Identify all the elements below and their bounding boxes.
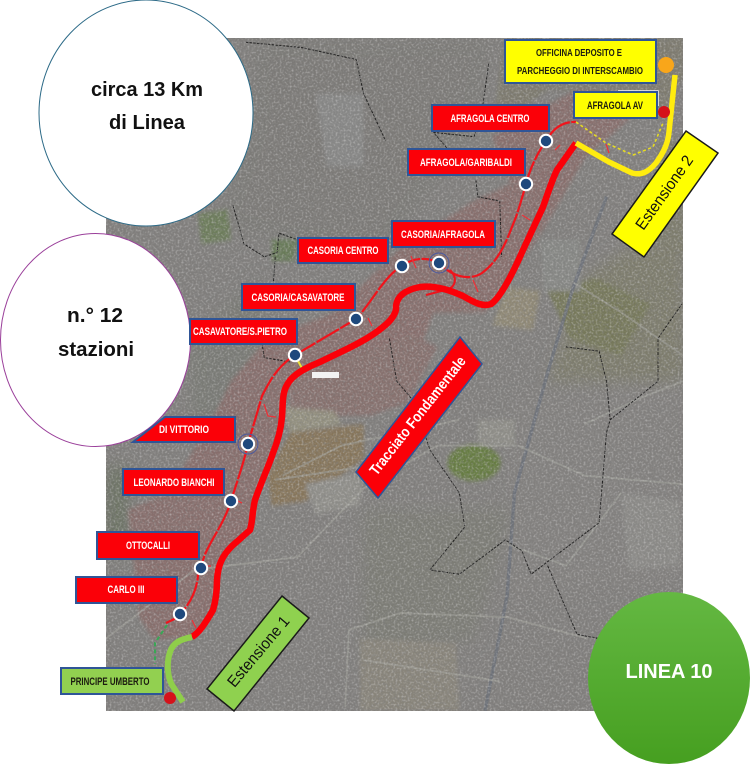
- label: Afragola AV: AFRAGOLA AV: [587, 100, 643, 112]
- label: Casoria/Casavatore: CASORIA/CASAVATORE: [252, 292, 344, 304]
- banner: Estensione 2: Estensione 2: [633, 153, 697, 233]
- banner: Tracciato Fondamentale: Tracciato Fondamentale: [366, 353, 470, 479]
- badge: Linea 10: [588, 592, 750, 764]
- label: Ottocalli: OTTOCALLI: [126, 540, 170, 552]
- circle: line length: circa 13 Km: [91, 79, 203, 101]
- label: Casavatore/S.Pietro: CASAVATORE/S.PIETRO: [193, 326, 287, 338]
- thin red line: Linea 10 stations route: [166, 122, 576, 623]
- yellow dashed route: [576, 122, 663, 155]
- label: Casoria/Afragola: CASORIA/AFRAGOLA: [401, 229, 485, 241]
- circle: line length: [39, 0, 253, 226]
- label: Afragola Centro: AFRAGOLA CENTRO: [450, 113, 530, 125]
- small red cross ticks on route: [192, 144, 609, 628]
- label: Di Vittorio: DI VITTORIO: [159, 424, 209, 436]
- label: Casoria Centro: CASORIA CENTRO: [308, 245, 379, 257]
- label: Afragola AV: [574, 92, 657, 118]
- label: Officina deposito: OFFICINA DEPOSITO E: [536, 47, 622, 59]
- thick yellow line: extension 2: [576, 75, 675, 174]
- label: Casoria/Casavatore: [242, 284, 355, 310]
- label: Di Vittorio: [133, 417, 235, 442]
- label: Leonardo Bianchi: LEONARDO BIANCHI: [134, 477, 214, 489]
- label: Carlo III: CARLO III: [108, 584, 144, 596]
- depot marker: [658, 57, 674, 73]
- aerial map background: [106, 38, 683, 711]
- thick green line: extension 1: [168, 637, 192, 702]
- label: Officina deposito: PARCHEGGIO DI INTERSCAMBIO: [517, 65, 643, 77]
- label: Ottocalli: [97, 532, 199, 559]
- badge: Linea 10: LINEA 10: [626, 661, 712, 683]
- yellow connector at Casavatore: [298, 361, 303, 370]
- label: Casavatore/S.Pietro: [190, 319, 297, 344]
- station markers: [174, 135, 552, 620]
- green dashed route: [155, 625, 167, 664]
- label: Principe Umberto: PRINCIPE UMBERTO: [70, 676, 150, 688]
- circle: number of stations: stazioni: [58, 339, 134, 361]
- circle: number of stations: n.° 12: [67, 305, 123, 327]
- terminal: Afragola AV: [658, 106, 670, 118]
- circle: number of stations: [0, 234, 190, 446]
- label: Officina deposito: [505, 40, 656, 83]
- white outline near Afragola AV: [618, 91, 658, 106]
- circle: line length: di Linea: [109, 112, 186, 134]
- banner: Estensione 1: [207, 596, 309, 711]
- thin red branch loop: [426, 270, 455, 295]
- thick red line: main route: [192, 143, 576, 637]
- terminal: Principe Umberto: [164, 692, 176, 704]
- label: Casoria/Afragola: [392, 221, 495, 247]
- label: Afragola Centro: [432, 105, 549, 131]
- white map callout strip: [312, 372, 339, 378]
- label: Carlo III: [76, 577, 177, 603]
- label: Casoria Centro: [298, 238, 388, 263]
- label: Principe Umberto: [61, 668, 163, 694]
- banner: Estensione 1: Estensione 1: [225, 613, 294, 691]
- banner: Estensione 2: [612, 131, 718, 257]
- label: Afragola/Garibaldi: AFRAGOLA/GARIBALDI: [420, 157, 512, 169]
- label: Leonardo Bianchi: [123, 469, 224, 495]
- label: Afragola/Garibaldi: [408, 149, 525, 175]
